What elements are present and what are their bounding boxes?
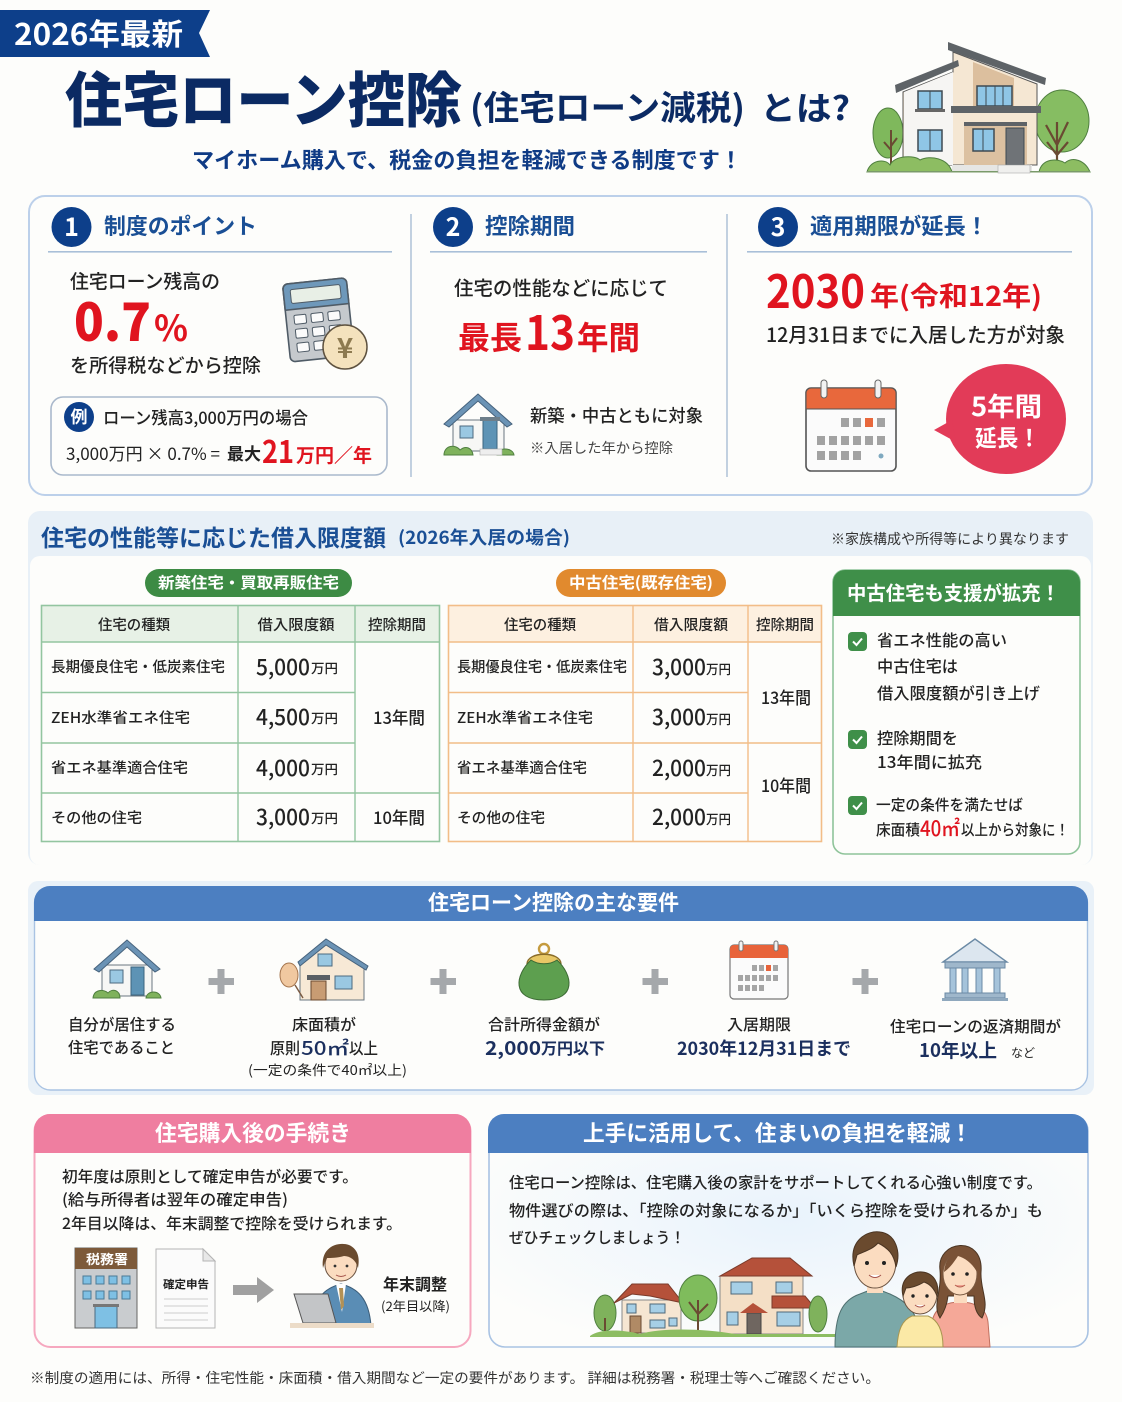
heading: 控除期間: 控除期間: [485, 209, 575, 241]
text: max 13 years: 最長: [458, 313, 522, 359]
table: used housing: 万円: [706, 709, 731, 728]
text: max 13 years: 13: [525, 295, 575, 364]
text: 2030年 (令和12年): 12月31日までに入居した方が対象: [766, 319, 1065, 348]
table: used housing: 借入限度額: [654, 614, 729, 635]
panel: procedure after purchase: [34, 1114, 471, 1347]
checklist item 2: 13年間に拡充: [877, 749, 982, 773]
text block: (給与所得者は翌年の確定申告): [62, 1188, 288, 1210]
text block: 2年目以降は、年末調整で控除を受けられます。: [62, 1212, 402, 1234]
text: 0.7% deduction: 0.7: [74, 281, 151, 356]
column 2: 控除期間: [430, 207, 707, 458]
plus: [642, 969, 668, 994]
pill label: [145, 569, 352, 597]
callout: 5年間延長！: 5年間: [971, 387, 1042, 424]
number badge 1: 1: [64, 208, 79, 244]
text: 0.7% deduction: [70, 267, 261, 378]
plus: [208, 969, 234, 994]
table: used housing: 控除期間: [756, 614, 814, 635]
text: 新築・中古ともに対象: 新築・中古ともに対象: [530, 403, 703, 428]
panel heading: 中古住宅も支援が拡充！: [847, 577, 1060, 606]
table: used housing: ZEH水準省エネ住宅: [457, 707, 593, 728]
table: new housing: 13年間: [373, 704, 425, 729]
requirement 2: floor area: 50㎡: [301, 1034, 349, 1061]
text block: [509, 1171, 1043, 1248]
checklist item 2: [848, 725, 982, 773]
requirement 2: floor area: (一定の条件で40㎡以上): [248, 1059, 407, 1079]
icon: calendar: [730, 941, 788, 999]
icon: house: [93, 940, 161, 998]
text block: 住宅ローン控除は、住宅購入後の家計をサポートしてくれる心強い制度です。: [509, 1171, 1042, 1193]
table: used housing: 3,000: [652, 650, 706, 682]
requirement 5: repayment period: など: [1011, 1044, 1035, 1061]
title: [65, 53, 850, 140]
section heading: [41, 519, 570, 553]
text: 2030年 (令和12年): 2030: [766, 256, 865, 322]
number badge 3: [758, 207, 798, 247]
table: new housing: 借入限度額: [258, 614, 335, 635]
table: new housing: 10年間: [373, 804, 425, 829]
father: [835, 1232, 918, 1347]
callout: example calculation: 万円／年: [296, 441, 372, 468]
number badge 1: [52, 207, 92, 247]
callout: example calculation: 例: [70, 403, 88, 428]
title: (住宅ローン減税): [470, 81, 745, 130]
text: 0.7% deduction: 住宅ローン残高の: [70, 267, 220, 294]
section heading: 住宅の性能等に応じた借入限度額: [41, 519, 386, 553]
table: new housing: ZEH水準省エネ住宅: [51, 707, 190, 728]
illustration: houses and trees: [590, 1258, 835, 1337]
icon: bank building: [942, 939, 1008, 1001]
requirement 1: own residence: 住宅であること: [68, 1036, 175, 1058]
requirement 3: income: 万円以下: [541, 1035, 605, 1059]
requirement 5: repayment period: 10年以上: [919, 1036, 997, 1063]
callout: example calculation: ローン残高3,000万円の場合: [103, 404, 308, 429]
icon: calculator and yen coin: [283, 278, 367, 369]
table: used housing: 住宅の種類: [504, 614, 576, 635]
icon: house with plan: [280, 939, 368, 1000]
arrow: [233, 1277, 274, 1303]
requirement 3: income: [485, 944, 605, 1061]
panel heading: 住宅購入後の手続き: [155, 1116, 351, 1148]
callout: example calculation: 3,000万円 × 0.7% =: [66, 440, 220, 465]
text block: ぜひチェックしましょう！: [509, 1226, 685, 1248]
checklist item 2: 控除期間を: [877, 725, 958, 749]
text: 年末調整: 年末調整: [383, 1271, 447, 1295]
icon: calculator and yen coin: ¥: [337, 327, 354, 367]
table: used housing: 万円: [706, 760, 731, 779]
table: new housing: 3,000: [256, 800, 310, 832]
table: new housing: 万円: [311, 658, 338, 677]
number badge 2: 2: [446, 208, 460, 244]
text: max 13 years: 年間: [577, 313, 640, 359]
table: new housing: 4,500: [256, 700, 310, 732]
icon: person at laptop: [290, 1244, 374, 1328]
checklist item 3: 40㎡: [920, 813, 960, 843]
panel: three points: [29, 196, 1092, 495]
callout: 5年間延長！: [934, 364, 1066, 474]
callout: 5年間延長！: 延長！: [975, 419, 1040, 453]
note: ※家族構成や所得等により異なります: [831, 529, 1069, 549]
checklist item 1: 借入限度額が引き上げ: [877, 680, 1040, 704]
requirement 4: move-in deadline: [677, 941, 851, 1061]
footnote: ※制度の適用には、所得・住宅性能・床面積・借入期間など一定の要件があります。 詳細は税務署・税理士等へご確認ください。: [30, 1368, 880, 1388]
checklist item 3: 一定の条件を満たせば: [876, 794, 1023, 815]
table: new housing: 4,000: [256, 751, 310, 783]
panel: main requirements: [28, 881, 1094, 1095]
table: new housing: その他の住宅: [51, 807, 142, 828]
icon: calendar: [806, 380, 896, 471]
column 3: 適用期限が延長: [747, 207, 1072, 474]
subtitle: マイホーム購入で、税金の負担を軽減できる制度です！: [192, 143, 742, 175]
child: [897, 1272, 943, 1347]
table: new housing: 万円: [311, 808, 338, 827]
text: 新築・中古ともに対象: ※入居した年から控除: [530, 438, 673, 458]
plus: [430, 969, 456, 994]
pill label: 中古住宅(既存住宅): [569, 571, 713, 593]
heading: 制度のポイント: 制度のポイント: [104, 209, 257, 241]
icon: coin purse: [519, 944, 569, 1000]
number badge 3: 3: [771, 208, 785, 244]
pill label: 新築住宅・買取再販住宅: [158, 571, 339, 593]
text block: 物件選びの際は、「控除の対象になるか」「いくら控除を受けられるか」も: [509, 1199, 1043, 1221]
callout: example calculation: 21: [262, 427, 294, 472]
table: new housing: 住宅の種類: [98, 614, 170, 635]
table: used housing: 長期優良住宅・低炭素住宅: [457, 656, 627, 677]
requirement 4: move-in deadline: 2030年12月31日まで: [677, 1035, 851, 1061]
title: とは?: [760, 82, 850, 130]
requirement 4: move-in deadline: 入居期限: [727, 1013, 792, 1035]
table: new housing: 万円: [311, 759, 338, 778]
icon: tax office: [75, 1248, 137, 1328]
title: 住宅ローン控除: [65, 53, 462, 140]
text: 年末調整: (2年目以降): [381, 1296, 450, 1315]
pill label: [556, 569, 726, 597]
table: used housing: その他の住宅: [457, 807, 545, 828]
text: max 13 years: [454, 272, 668, 364]
requirement 3: income: 2,000: [485, 1034, 541, 1061]
panel heading: 住宅ローン控除の主な要件: [428, 887, 679, 917]
column 1: 制度のポイント: [48, 207, 392, 475]
checklist item 3: 以上から対象に！: [961, 819, 1069, 840]
table: used housing: [448, 569, 822, 842]
text: max 13 years: 住宅の性能などに応じて: [454, 272, 668, 301]
panel heading: 上手に活用して、住まいの負担を軽減！: [583, 1116, 972, 1148]
checklist item 1: [848, 627, 1040, 704]
text: 0.7% deduction: を所得税などから控除: [70, 351, 261, 378]
icon: small house: [444, 394, 514, 455]
panel: used-home support: [833, 570, 1080, 854]
table: new housing: 長期優良住宅・低炭素住宅: [51, 656, 225, 677]
section heading: (2026年入居の場合): [398, 524, 570, 550]
illustration: family: [835, 1232, 990, 1347]
panel: borrowing limits: [28, 511, 1093, 865]
text block: 初年度は原則として確定申告が必要です。: [62, 1165, 358, 1187]
requirement 2: floor area: 以上: [349, 1035, 378, 1059]
text block: [62, 1165, 402, 1234]
text: 新築・中古ともに対象: [530, 403, 703, 458]
checklist item 1: 省エネ性能の高い: [877, 627, 1007, 651]
callout: example calculation: 最大: [227, 440, 261, 465]
icon: tax office: 税務署: [86, 1249, 128, 1268]
checklist item 3: [848, 794, 1069, 843]
table: new housing: 控除期間: [368, 614, 426, 635]
icon: tax return document: 確定申告: [163, 1276, 209, 1292]
table: used housing: 万円: [706, 659, 731, 678]
table: used housing: 2,000: [652, 800, 706, 832]
ribbon: 2026年最新: 2026年最新: [14, 10, 183, 54]
requirement 5: repayment period: [890, 939, 1061, 1063]
heading: 適用期限が延長！: 適用期限が延長！: [810, 209, 988, 241]
text: 2030年 (令和12年): 年(令和12年): [870, 275, 1042, 314]
table: used housing: 2,000: [652, 751, 706, 783]
table: new housing: 5,000: [256, 650, 310, 682]
panel: use it well: [488, 1114, 1088, 1347]
table: used housing: 10年間: [761, 772, 811, 797]
requirement 3: income: 合計所得金額が: [488, 1013, 601, 1035]
requirement 2: floor area: 床面積が: [292, 1013, 357, 1035]
table: used housing: 万円: [706, 809, 731, 828]
plus: [852, 969, 878, 994]
icon: tax return document: [156, 1249, 215, 1328]
mother: [932, 1245, 990, 1347]
requirement 1: own residence: 自分が居住する: [68, 1013, 176, 1035]
table: new housing: 万円: [311, 708, 338, 727]
requirement 2: floor area: [248, 939, 407, 1079]
table: used housing: 省エネ基準適合住宅: [457, 757, 587, 778]
table: new housing: [41, 569, 440, 842]
checklist item 3: 床面積: [876, 819, 920, 840]
requirement 1: own residence: [68, 940, 176, 1058]
text: 年末調整: [381, 1271, 450, 1315]
text: 2030年 (令和12年): [766, 256, 1065, 348]
number badge 2: [433, 207, 473, 247]
icon: two-storey house with trees: [867, 42, 1090, 173]
callout: example calculation: [51, 397, 387, 475]
table: new housing: 省エネ基準適合住宅: [51, 757, 188, 778]
table: used housing: 3,000: [652, 700, 706, 732]
checklist item 1: 中古住宅は: [877, 653, 958, 677]
table: used housing: 13年間: [761, 684, 811, 709]
text: 0.7% deduction: %: [154, 300, 188, 352]
header: [0, 10, 1090, 175]
requirement 5: repayment period: 住宅ローンの返済期間が: [890, 1015, 1061, 1037]
requirement 2: floor area: 原則: [270, 1035, 300, 1059]
